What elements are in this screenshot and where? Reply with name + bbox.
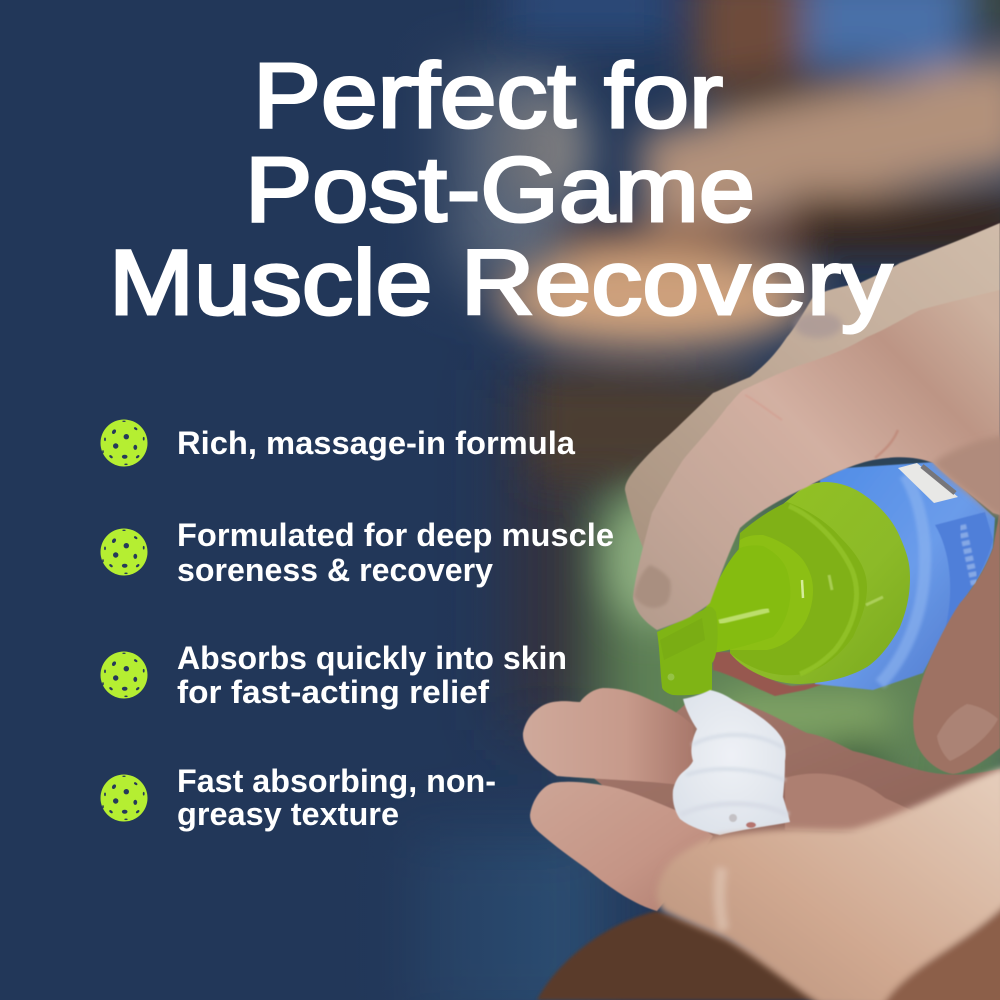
icon: pickleball xyxy=(100,774,148,822)
title: Perfect for xyxy=(253,45,723,147)
palm centre xyxy=(785,774,915,832)
upper hand with fingers xyxy=(625,223,1000,630)
finger two xyxy=(530,782,713,911)
bullet: deep muscle soreness: Formulated for deep muscle xyxy=(177,517,614,553)
lower thumb, foreground blur xyxy=(657,767,1000,1000)
finger one xyxy=(523,688,695,785)
label barcode xyxy=(898,463,958,503)
icon: pickleball xyxy=(100,528,148,576)
palm base xyxy=(590,699,1000,860)
far finger behind bottle xyxy=(713,652,830,696)
palm hand with fingers xyxy=(523,688,1000,911)
right thumb holding bottle xyxy=(913,510,1000,774)
back finger xyxy=(625,223,1000,560)
icon: pickleball xyxy=(100,420,148,466)
bullet: rich formula: Rich, massage-in formula xyxy=(177,425,575,461)
icon: pickleball xyxy=(100,652,148,698)
bullet: absorbs quickly: for fast-acting relief xyxy=(177,674,489,710)
title xyxy=(109,45,892,334)
front finger and knuckle xyxy=(633,290,1000,630)
foam bottle xyxy=(657,462,995,695)
pump nozzle xyxy=(657,606,718,695)
knuckle crease xyxy=(745,395,782,420)
inner collar xyxy=(730,502,867,675)
collar ring xyxy=(730,535,813,650)
thumbnail xyxy=(937,704,998,761)
bullet: absorbs quickly xyxy=(100,640,567,710)
bullet: rich formula xyxy=(100,420,575,466)
knee at bottom xyxy=(537,911,825,1000)
title: Muscle Recovery xyxy=(109,232,892,334)
bullet: non-greasy texture xyxy=(100,763,496,832)
finger nail xyxy=(634,565,671,608)
blue body xyxy=(815,462,995,690)
foam dollop xyxy=(673,690,790,835)
title: Post-Game xyxy=(245,139,755,241)
pump stem xyxy=(705,545,790,653)
green collar xyxy=(730,482,910,684)
skin shadow patch xyxy=(794,312,842,338)
side of hand shadow xyxy=(933,435,1000,518)
bullet: non-greasy texture: Fast absorbing, non- xyxy=(177,763,496,799)
bullet: absorbs quickly: Absorbs quickly into skin xyxy=(177,640,567,676)
bullet: non-greasy texture: greasy texture xyxy=(177,796,399,832)
bullet: deep muscle soreness xyxy=(100,517,614,588)
bullet: deep muscle soreness: soreness & recovery xyxy=(177,552,493,588)
